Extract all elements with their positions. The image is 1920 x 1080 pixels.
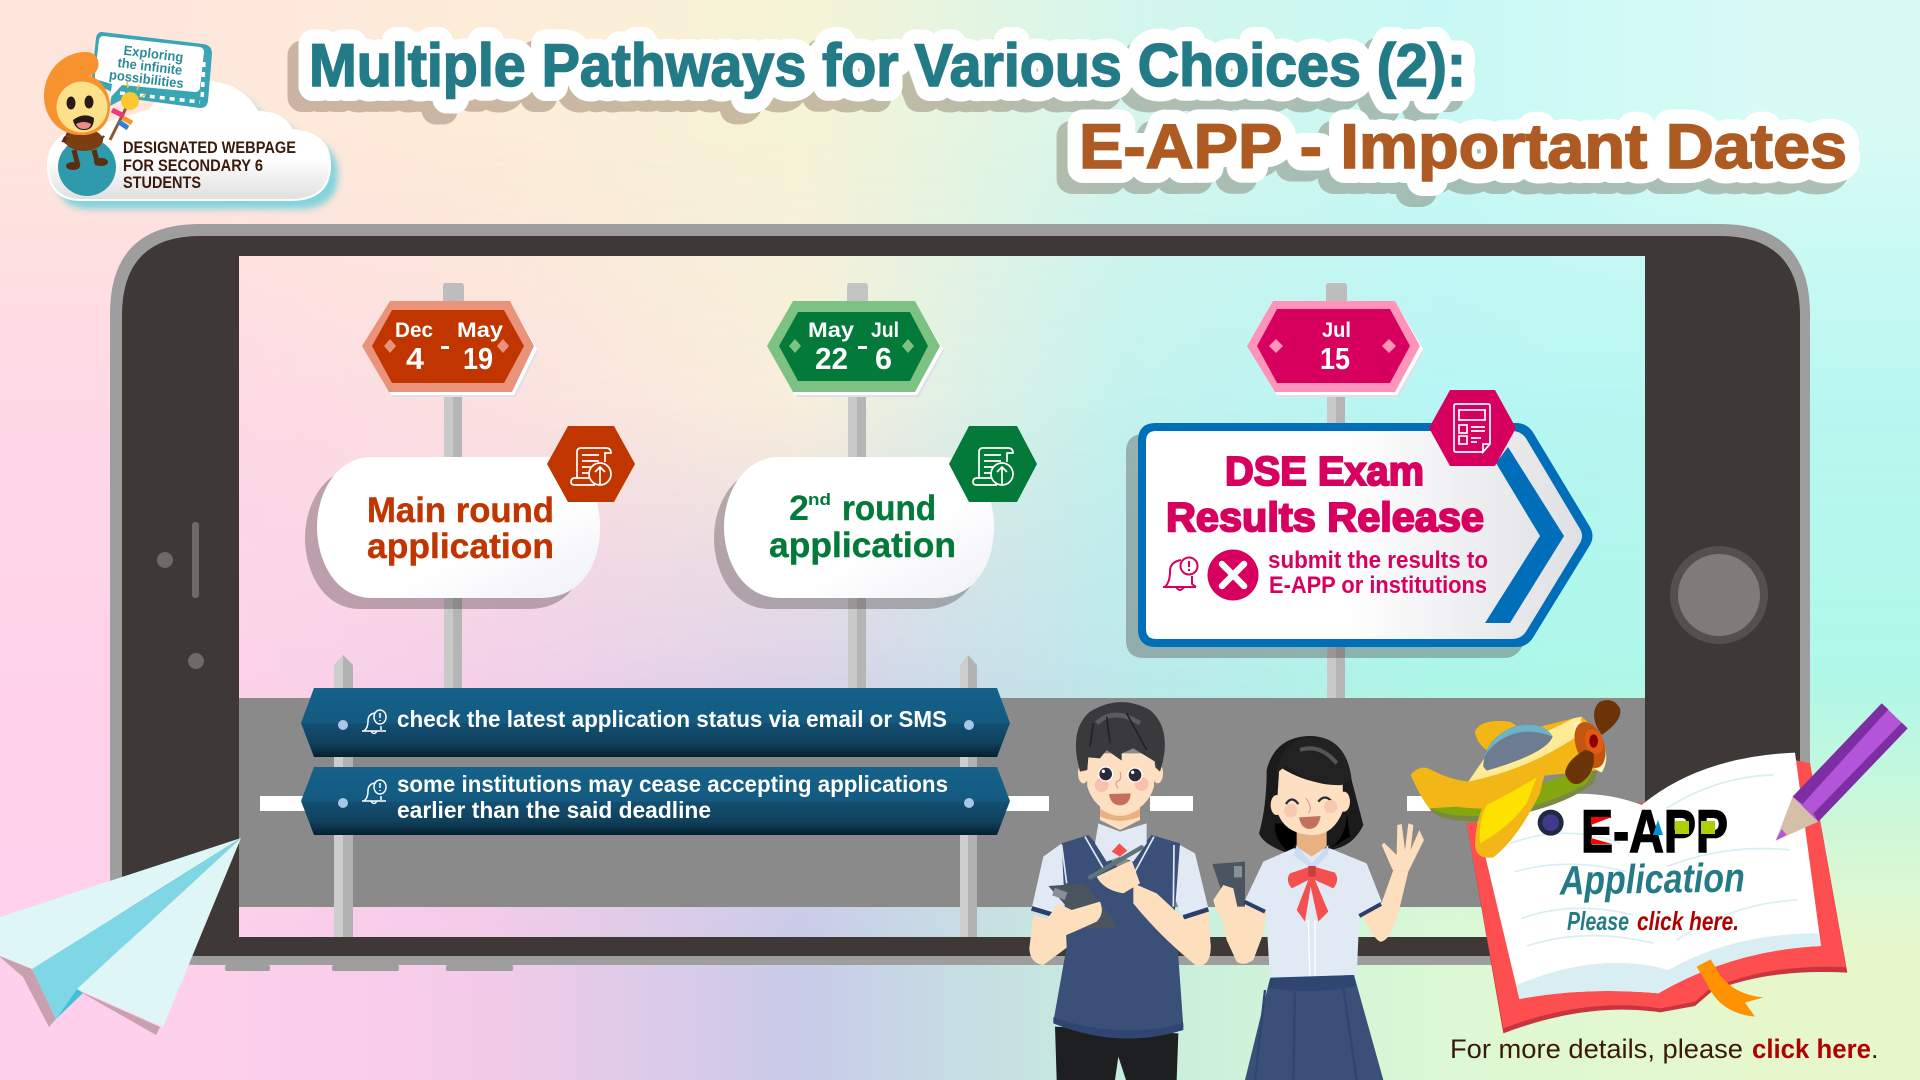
illustration: girl student waving xyxy=(1212,736,1424,1080)
panel: DSE exam results release sign: Results Release xyxy=(1166,494,1484,540)
panel: main round application xyxy=(305,426,635,609)
speech bubble: exploring the infinite possibilities: Exploring xyxy=(123,43,184,65)
mascot character with light bulb xyxy=(44,52,146,170)
footer link text: For more details, please xyxy=(1450,1034,1743,1064)
date sign: May 22 - Jul 6: 22 xyxy=(815,341,848,376)
speech bubble: exploring the infinite possibilities: the infinite xyxy=(117,55,184,78)
grey road xyxy=(239,698,1645,907)
date sign: Jul 15 xyxy=(1247,301,1424,397)
upper sign posts xyxy=(443,283,1347,698)
illustration: open book with E-APP link: E-APP xyxy=(1581,798,1728,865)
title line 2: E-APP - Important Dates: E-APP - Important Dates xyxy=(1068,123,1836,193)
date sign: Dec 4 - May 19 xyxy=(362,301,538,397)
illustration: boy student with tablet xyxy=(1029,702,1211,1080)
notice banner: application status xyxy=(301,688,1010,757)
notice banner: early deadline: some institutions may cease accepting applications xyxy=(397,771,948,797)
panel: DSE exam results release sign: E-APP or institutions xyxy=(1269,572,1487,599)
title line 2: E-APP - Important Dates: E-APP - Important Dates xyxy=(1079,112,1847,182)
illustration: open book with E-APP link xyxy=(1467,753,1847,1033)
speech bubble: exploring the infinite possibilities: possibilities xyxy=(108,67,185,91)
illustration: open book with E-APP link: Please xyxy=(1567,906,1629,936)
illustration: open book with E-APP link: Application xyxy=(1559,854,1745,904)
title line 1: Multiple Pathways for Various Choices (2): Multiple Pathways for Various Choices (2): xyxy=(309,32,1466,99)
illustration: purple pencil xyxy=(1776,703,1908,841)
date sign: Jul 15: Jul xyxy=(1322,319,1351,342)
notice banner: early deadline xyxy=(301,767,1010,835)
panel: main round application: Main round xyxy=(367,491,554,530)
date sign: Jul 15: 15 xyxy=(1320,341,1350,376)
date sign: Dec 4 - May 19: Dec xyxy=(395,319,433,342)
notice banner: early deadline: earlier than the said deadline xyxy=(397,797,711,823)
illustration: open book with E-APP link: click here. xyxy=(1637,906,1739,936)
logo: designated webpage badge with mascot: DESIGNATED WEBPAGE xyxy=(123,139,296,157)
logo: designated webpage badge with mascot xyxy=(44,32,338,209)
speech bubble: exploring the infinite possibilities xyxy=(92,32,212,108)
panel: 2nd round application: application xyxy=(769,526,956,565)
footer link text: . xyxy=(1871,1034,1879,1064)
panel: 2nd round application xyxy=(714,426,1037,609)
panel: DSE exam results release sign: submit the results to xyxy=(1268,547,1488,574)
panel: 2nd round application: nd xyxy=(808,490,831,509)
notice banner: application status: check the latest application status via email or SMS xyxy=(397,706,947,732)
panel: 2nd round application: round xyxy=(842,489,936,528)
date sign: Dec 4 - May 19: 4 xyxy=(406,341,425,376)
illustration: toy aeroplane xyxy=(1411,700,1620,858)
panel: DSE exam results release sign xyxy=(1126,390,1592,658)
logo: designated webpage badge with mascot: FOR SECONDARY 6 xyxy=(123,157,263,175)
date sign: Dec 4 - May 19: 19 xyxy=(463,341,493,376)
title line 2: E-APP - Important Dates: E-APP - Important Dates xyxy=(1079,112,1847,182)
date sign: May 22 - Jul 6 xyxy=(767,301,944,397)
logo: designated webpage badge with mascot: STUDENTS xyxy=(123,174,201,192)
date sign: Dec 4 - May 19: May xyxy=(457,319,503,342)
illustration: paper plane xyxy=(0,838,241,1035)
panel: DSE exam results release sign: DSE Exam xyxy=(1225,448,1424,494)
smartphone frame xyxy=(110,224,1810,971)
title line 1: Multiple Pathways for Various Choices (2): Multiple Pathways for Various Choices (2): xyxy=(309,32,1466,99)
date sign: May 22 - Jul 6: Jul xyxy=(871,319,899,342)
panel: main round application: application xyxy=(367,527,554,566)
footer link text: click here xyxy=(1752,1034,1871,1064)
date sign: May 22 - Jul 6: May xyxy=(808,319,854,342)
title line 1: Multiple Pathways for Various Choices (2): Multiple Pathways for Various Choices (2): xyxy=(298,43,1455,110)
panel: 2nd round application: 2 xyxy=(789,489,809,528)
lower sign posts xyxy=(334,655,977,937)
date sign: May 22 - Jul 6: 6 xyxy=(875,341,892,376)
